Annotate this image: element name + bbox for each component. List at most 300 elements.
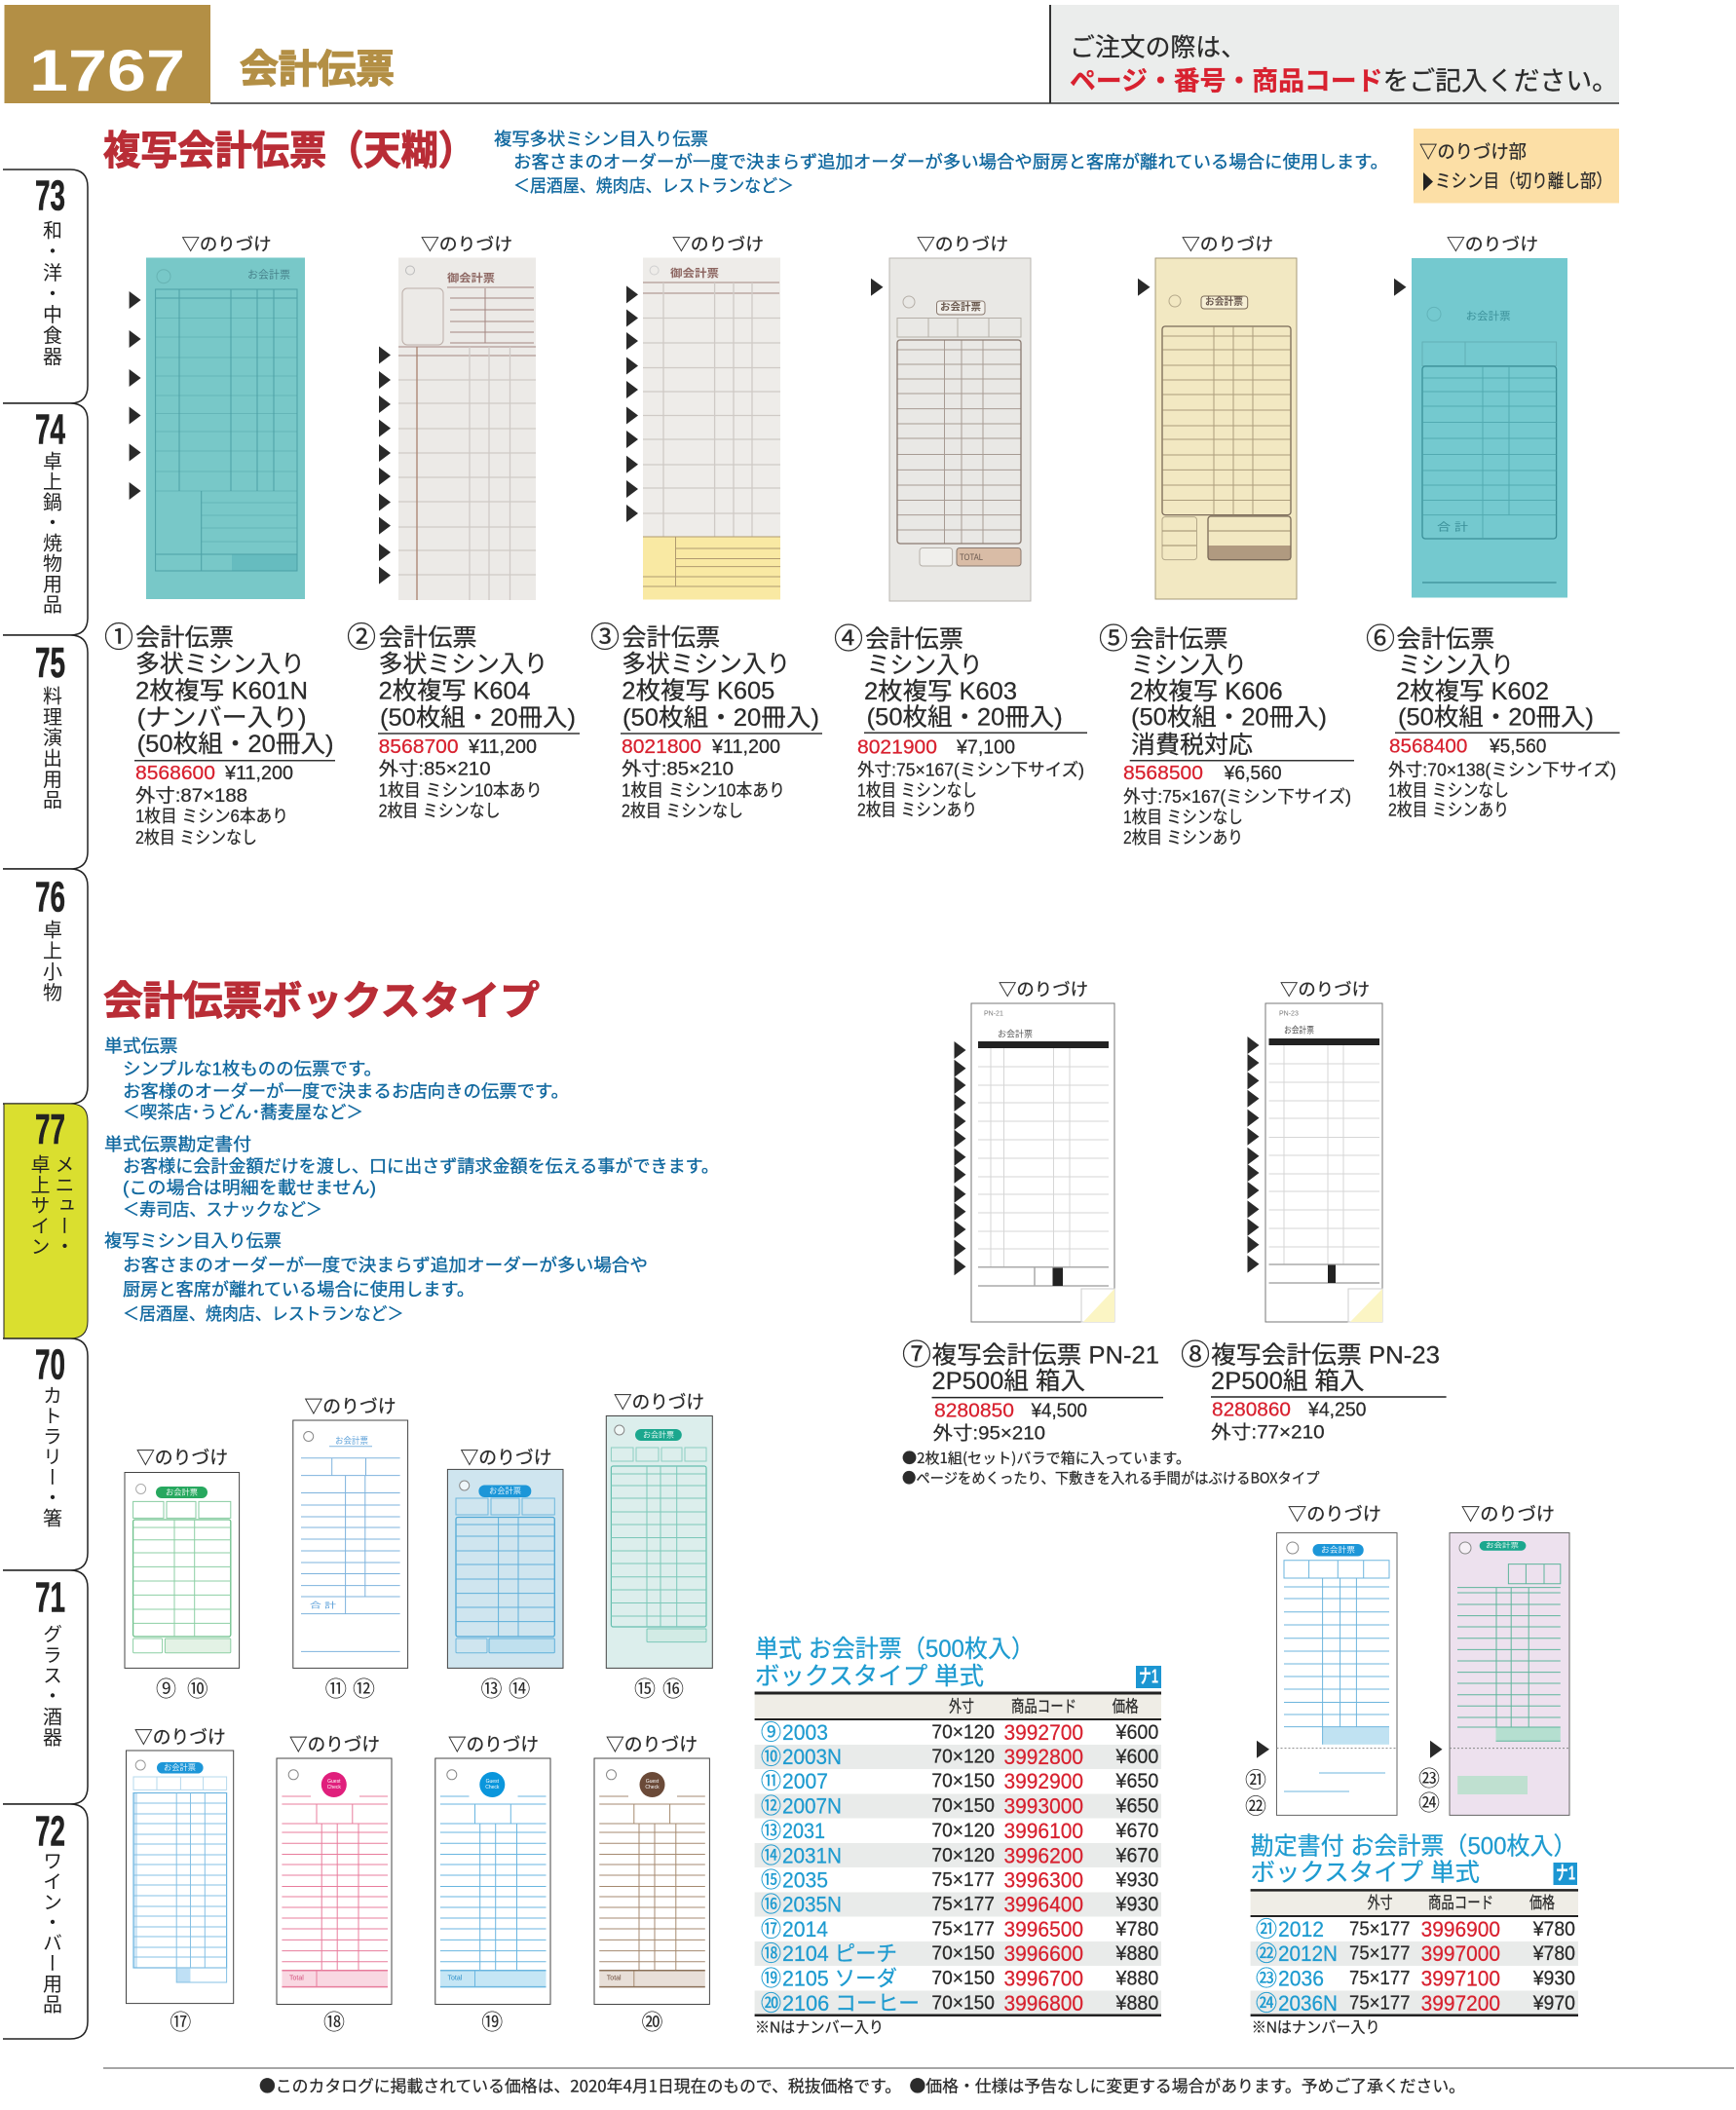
table footnote: ※Nはナンバー入り	[1252, 2020, 1380, 2036]
row 17: ¥780	[1115, 1918, 1158, 1940]
table header row: 外寸	[949, 1697, 974, 1716]
caption 3: (50枚組・20冊入)	[623, 704, 819, 732]
description: with bill	[104, 1135, 719, 1220]
caption 7	[902, 1339, 1163, 1444]
row 12: ¥650	[1115, 1794, 1158, 1817]
caption 8: 外寸:77×210	[1211, 1422, 1325, 1444]
caption 5: 8568500	[1123, 763, 1203, 784]
caption 6: 2枚複写 K602	[1396, 678, 1549, 705]
tab 70	[3, 1338, 88, 1570]
caption 2: 外寸:85×210	[379, 758, 491, 779]
page number tab: 1767	[29, 38, 185, 103]
row 12: ⑫	[761, 1793, 781, 1818]
caption 4: 2枚複写 K603	[864, 678, 1017, 705]
caption 3: ③	[590, 622, 620, 655]
form 21-22: ㉒	[1245, 1794, 1266, 1819]
row 22: 2012N	[1278, 1941, 1338, 1966]
caption 5: 会計伝票	[1130, 626, 1228, 654]
row 24: ㉔	[1256, 1991, 1277, 2016]
caption 8: 2P500組 箱入	[1211, 1368, 1364, 1395]
form 1: K601N: お会計票	[247, 267, 290, 281]
form 19 soda	[435, 1734, 550, 2034]
row 21: ㉑	[1256, 1917, 1277, 1941]
caption 1: ¥11,200	[224, 763, 293, 784]
description: single slip: シンプルな1枚ものの伝票です。	[123, 1060, 382, 1079]
form 4: K603	[871, 258, 1031, 601]
row 19: 70×150	[931, 1968, 995, 1989]
row 16: 3996400	[1003, 1892, 1083, 1917]
tab 71: グラス・酒器	[39, 1624, 62, 1748]
form 8: PN-23	[1247, 980, 1382, 1322]
row 19: ⑲	[761, 1966, 781, 1991]
form 19 soda: Total	[448, 1976, 463, 1981]
caption 6: 外寸:70×138(ミシン下サイズ)	[1388, 761, 1616, 780]
box type descriptions	[104, 1036, 719, 1324]
box notes	[902, 1448, 1319, 1488]
section description	[494, 130, 1388, 196]
form 20 coffee: Check	[645, 1785, 660, 1790]
row 9: 3992700	[1003, 1720, 1083, 1745]
form 7: PN-21	[955, 980, 1114, 1322]
caption 3: 会計伝票	[622, 624, 720, 652]
caption 1: 2枚目 ミシンなし	[135, 828, 257, 848]
table heading: ボックスタイプ 単式	[755, 1663, 984, 1690]
form 13-14 blue: ⑬	[481, 1677, 503, 1701]
table heading	[755, 1636, 1035, 1690]
caption 1	[104, 622, 335, 848]
form 18 peach: ⑱	[323, 2011, 345, 2034]
form 9-10 green: お会計票	[166, 1487, 198, 1496]
row 10: 70×120	[931, 1746, 995, 1767]
tab 71	[3, 1570, 88, 1804]
row 24: ¥970	[1532, 1992, 1575, 2015]
row 16: ¥930	[1115, 1894, 1158, 1915]
description: perforated copy: 厨房と客席が離れている場合に使用します。	[123, 1280, 474, 1300]
description: perforated copy: 複写ミシン目入り伝票	[104, 1231, 282, 1251]
row 10: 2003N	[782, 1745, 842, 1769]
form 5: K606: お会計票	[1205, 295, 1243, 308]
caption 4: 8021900	[857, 736, 937, 758]
form 8: PN-23: ▽のりづけ	[1280, 980, 1370, 999]
caption 1: 2枚複写 K601N	[135, 678, 308, 705]
row 10: 3992800	[1003, 1745, 1083, 1769]
description: with bill: (この場合は明細を載せません)	[123, 1179, 376, 1198]
table header row: 商品コード	[1011, 1697, 1076, 1716]
row 23: 3997100	[1421, 1966, 1500, 1991]
row 23	[1256, 1966, 1575, 1991]
row 21: 3996900	[1421, 1917, 1500, 1941]
tab 70: 70	[35, 1340, 65, 1389]
row 9: ⑨	[761, 1720, 781, 1745]
form 7: PN-21: PN-21	[984, 1011, 1003, 1017]
caption 7: ¥4,500	[1031, 1400, 1087, 1421]
description: with bill: 単式伝票勘定書付	[104, 1135, 251, 1154]
form 15-16 mint	[606, 1391, 712, 1701]
box notes: ●ページをめくったり、下敷きを入れる手間がはぶけるBOXタイプ	[902, 1467, 1319, 1488]
tab 76: 76	[35, 873, 65, 922]
row 20: ¥880	[1115, 1992, 1158, 2015]
row 15: ¥930	[1115, 1868, 1158, 1892]
row 22	[1256, 1941, 1575, 1966]
row 12	[761, 1793, 1158, 1818]
row 11	[761, 1769, 1158, 1793]
table header row: 外寸	[1368, 1894, 1393, 1912]
form 20 coffee: Guest	[646, 1779, 660, 1785]
form 15-16 mint: お会計票	[643, 1430, 674, 1440]
form 9-10 green: ⑩	[187, 1677, 208, 1701]
form 13-14 blue: ▽のりづけ	[460, 1448, 551, 1469]
row 23: 75×177	[1349, 1968, 1410, 1989]
description: perforated copy: お客さまのオーダーが一度で決まらず追加オーダーが多い場合や	[123, 1256, 648, 1275]
caption 3: 多状ミシン入り	[622, 651, 790, 678]
tab 77 active: 77	[35, 1106, 65, 1153]
row 24: 75×177	[1349, 1992, 1410, 2014]
caption 8: ¥4,250	[1307, 1400, 1366, 1421]
caption 7: 複写会計伝票 PN-21	[931, 1341, 1159, 1369]
row 12: 2007N	[782, 1793, 842, 1818]
caption 4: ④	[834, 623, 863, 656]
caption 8	[1181, 1339, 1447, 1444]
row 14: ¥670	[1115, 1844, 1158, 1866]
row 13: ¥670	[1115, 1820, 1158, 1842]
form 3: K605: 御会計票	[670, 266, 719, 280]
form 8: PN-23: PN-23	[1279, 1011, 1299, 1017]
form 20 coffee: ⑳	[641, 2011, 662, 2034]
row 13	[761, 1819, 1158, 1843]
row 22: ㉒	[1256, 1941, 1277, 1966]
section title: 複写会計伝票(天糊): 複写会計伝票（天糊）	[103, 129, 475, 173]
form 18 peach: Guest	[327, 1779, 341, 1785]
row 15	[761, 1868, 1158, 1892]
order notice panel	[1050, 5, 1619, 103]
paste labels row 1	[181, 235, 1538, 254]
description: single slip: 単式伝票	[104, 1036, 177, 1056]
caption 1: (50枚組・20冊入)	[137, 731, 334, 758]
caption 1: 多状ミシン入り	[135, 651, 305, 678]
row 20: ⑳	[761, 1991, 781, 2016]
row 22: ¥780	[1532, 1942, 1575, 1965]
row 18: ⑱	[761, 1941, 781, 1966]
caption 6: ⑥	[1366, 623, 1395, 656]
caption 3: ¥11,200	[711, 736, 780, 758]
row 19: 2105 ソーダ	[782, 1966, 897, 1991]
form 20 coffee: Total	[607, 1976, 622, 1981]
tab 72	[3, 1804, 88, 2039]
row 14: 70×120	[931, 1845, 995, 1866]
row 10	[761, 1745, 1158, 1769]
caption 3: 2枚目 ミシンなし	[622, 801, 743, 820]
row 23: 2036	[1278, 1966, 1324, 1991]
row 18: ¥880	[1115, 1942, 1158, 1965]
row 17	[761, 1917, 1158, 1941]
table header row	[755, 1693, 1161, 1719]
row 19: ¥880	[1115, 1968, 1158, 1989]
table heading: 単式 お会計票（500枚入）	[755, 1636, 1035, 1663]
table header row	[1251, 1890, 1578, 1916]
description: perforated copy: ＜居酒屋、焼肉店、レストランなど＞	[123, 1304, 403, 1324]
header title: 会計伝票	[240, 49, 395, 92]
form 15-16 mint: ⑯	[662, 1677, 684, 1701]
row 14: 3996200	[1003, 1843, 1083, 1867]
table footnote: ※Nはナンバー入り	[755, 2020, 884, 2036]
caption 4: (50枚組・20冊入)	[867, 704, 1063, 732]
tab 74	[3, 403, 88, 635]
badge	[1553, 1863, 1577, 1885]
row 11: ⑪	[761, 1769, 781, 1793]
caption 4: 会計伝票	[865, 626, 963, 654]
row 15: ⑮	[761, 1868, 781, 1892]
caption 5: ミシン入り	[1131, 652, 1247, 679]
form 6: K602	[1394, 258, 1567, 598]
badge: ナ1	[1139, 1666, 1158, 1687]
form 2: K604	[379, 257, 536, 600]
caption 4	[834, 623, 1087, 820]
paste labels row 1: ▽のりづけ	[672, 235, 764, 254]
order notice panel: ご注文の際は、	[1070, 33, 1246, 62]
caption 6: ¥5,560	[1489, 736, 1546, 758]
caption 7: ⑦	[902, 1339, 931, 1372]
form 17: お会計票	[164, 1762, 196, 1772]
tab 72: ワイン・バー用品	[39, 1851, 62, 2015]
tab 77 active: メニュー・	[52, 1154, 73, 1257]
row 17: ⑰	[761, 1917, 781, 1941]
row 11: 2007	[782, 1769, 828, 1793]
row 14: 2031N	[782, 1843, 842, 1867]
row 11: 3992900	[1003, 1769, 1083, 1793]
caption 2: 2枚目 ミシンなし	[379, 801, 501, 820]
caption 6: 2枚目 ミシンあり	[1388, 801, 1509, 820]
caption 5: (50枚組・20冊入)	[1131, 704, 1327, 732]
caption 5: 消費税対応	[1131, 732, 1253, 759]
row 11: 70×150	[931, 1771, 995, 1792]
tab 71: 71	[35, 1574, 65, 1621]
caption 2: (50枚組・20冊入)	[380, 704, 576, 732]
row 15: 75×177	[931, 1869, 995, 1891]
caption 1: 会計伝票	[135, 624, 234, 652]
form 9-10 green	[125, 1448, 240, 1701]
caption 5: ¥6,560	[1224, 763, 1282, 784]
order notice panel: ページ・番号・商品コードをご記入ください。	[1070, 66, 1618, 95]
legend box: ミシン目（切り離し部）	[1435, 170, 1612, 192]
paste labels row 1: ▽のりづけ	[181, 235, 271, 254]
form 13-14 blue	[447, 1448, 563, 1701]
form 1: K601N	[130, 257, 305, 599]
paste labels row 1: ▽のりづけ	[1447, 235, 1538, 254]
form 6: K602: お会計票	[1466, 309, 1511, 322]
form 11-12 white: 合 計	[310, 1600, 336, 1609]
row 21: ¥780	[1532, 1918, 1575, 1940]
badge	[1136, 1666, 1161, 1688]
caption 6: 会計伝票	[1396, 626, 1494, 654]
caption 2: 2枚複写 K604	[379, 678, 531, 705]
row 17: 2014	[782, 1917, 828, 1941]
caption 7: 2P500組 箱入	[931, 1368, 1085, 1395]
row 21: 2012	[1278, 1917, 1324, 1941]
caption 3: 1枚目 ミシン10本あり	[622, 781, 785, 801]
form 8: PN-23: お会計票	[1284, 1025, 1314, 1036]
tab 75	[3, 635, 88, 869]
caption 2: 会計伝票	[379, 624, 477, 652]
section description: お客さまのオーダーが一度で決まらず追加オーダーが多い場合や厨房と客席が離れている場合に使用します。	[513, 152, 1388, 171]
tab 73: 73	[35, 171, 65, 220]
caption 7: 8280850	[934, 1400, 1014, 1421]
row 13: 2031	[782, 1819, 825, 1843]
form 6: K602: 合 計	[1437, 520, 1468, 534]
row 18: 2104 ピーチ	[782, 1941, 897, 1966]
form 19 soda: Guest	[486, 1779, 500, 1785]
caption 1: 8568600	[135, 763, 215, 784]
form 18 peach: Check	[327, 1785, 341, 1790]
caption 8: 複写会計伝票 PN-23	[1211, 1341, 1440, 1369]
row 16: 75×177	[931, 1894, 995, 1915]
row 13: 70×120	[931, 1821, 995, 1842]
form 17	[127, 1726, 234, 2034]
row 13: ⑬	[761, 1819, 781, 1843]
row 16: 2035N	[782, 1892, 842, 1917]
description: perforated copy	[104, 1231, 648, 1324]
row 18: 3996600	[1003, 1941, 1083, 1966]
caption 1: (ナンバー入り)	[137, 704, 307, 732]
form 19 soda: ▽のりづけ	[448, 1734, 539, 1755]
caption 4: ¥7,100	[956, 736, 1015, 758]
caption 5: 1枚目 ミシンなし	[1123, 808, 1243, 827]
row 18	[761, 1941, 1158, 1966]
row 19	[761, 1966, 1158, 1991]
form 19 soda: ⑲	[481, 2011, 503, 2034]
alternating row shading	[755, 1745, 1161, 2015]
form 3: K605	[626, 257, 780, 600]
row 14	[761, 1843, 1158, 1867]
tab 74: 74	[35, 405, 65, 454]
form 23-24: ㉔	[1418, 1790, 1440, 1816]
form 11-12 white: ⑫	[353, 1677, 375, 1701]
form 18 peach: ▽のりづけ	[289, 1734, 380, 1755]
row 23: ㉓	[1256, 1966, 1277, 1991]
caption 2: 8568700	[379, 736, 459, 758]
caption 2: ②	[347, 622, 376, 655]
description: single slip: お客様のオーダーが一度で決まるお店向きの伝票です。	[123, 1081, 569, 1101]
row 14: ⑭	[761, 1843, 781, 1867]
form 11-12 white: お会計票	[335, 1435, 368, 1446]
row 23: ¥930	[1532, 1968, 1575, 1989]
row 9	[761, 1720, 1158, 1745]
table header row: 価格	[1529, 1894, 1555, 1912]
row 24: 3997200	[1421, 1991, 1500, 2016]
caption 2: 多状ミシン入り	[379, 651, 548, 678]
legend box	[1414, 129, 1619, 203]
caption 2	[347, 622, 580, 820]
tab 73: 和・洋・中食器	[39, 220, 62, 367]
form 11-12 white: ▽のりづけ	[304, 1396, 396, 1417]
form 13-14 blue: お会計票	[489, 1486, 521, 1495]
form 18 peach: Total	[289, 1976, 304, 1981]
tab 76	[3, 869, 88, 1104]
form 23-24: お会計票	[1486, 1540, 1519, 1549]
form 2: K604: 御会計票	[447, 271, 495, 284]
form 17: ⑰	[170, 2011, 191, 2034]
form 11-12 white	[293, 1396, 408, 1701]
caption 1: ①	[104, 622, 133, 655]
row 10: ¥600	[1115, 1746, 1158, 1768]
caption 5: 2枚目 ミシンあり	[1123, 828, 1243, 848]
caption 6: 8568400	[1389, 736, 1467, 758]
caption 4: 1枚目 ミシンなし	[857, 781, 977, 801]
form 19 soda: Check	[485, 1785, 500, 1790]
box notes: ●2枚1組(セット)バラで箱に入っています。	[902, 1448, 1190, 1468]
description: with bill: お客様に会計金額だけを渡し、口に出さず請求金額を伝える事ができます。	[123, 1157, 719, 1177]
sidebar tabs	[3, 170, 88, 2039]
caption 5: 2枚複写 K606	[1130, 678, 1283, 705]
row 18: 70×150	[931, 1943, 995, 1965]
row 9: ¥600	[1115, 1721, 1158, 1744]
caption 2: ¥11,200	[468, 736, 537, 758]
caption 1: 外寸:87×188	[135, 785, 247, 807]
caption 3: 2枚複写 K605	[622, 678, 774, 705]
form 15-16 mint: ⑮	[634, 1677, 656, 1701]
row 10: ⑩	[761, 1745, 781, 1769]
row 17: 75×177	[931, 1919, 995, 1940]
form 4: K603: TOTAL	[960, 552, 983, 562]
badge: ナ1	[1556, 1863, 1575, 1884]
tab 75: 料理演出用品	[39, 686, 62, 810]
paste labels row 1: ▽のりづけ	[421, 235, 512, 254]
paste labels row 1: ▽のりづけ	[917, 235, 1008, 254]
table: single slip box type	[755, 1636, 1161, 2036]
paste labels row 1: ▽のりづけ	[1182, 235, 1273, 254]
caption 4: 外寸:75×167(ミシン下サイズ)	[857, 761, 1084, 780]
row 12: 70×150	[931, 1795, 995, 1817]
form 23-24: ▽のりづけ	[1461, 1504, 1555, 1526]
table header row: 商品コード	[1428, 1894, 1493, 1912]
caption 7: 外寸:95×210	[933, 1422, 1045, 1444]
form 21-22: お会計票	[1321, 1545, 1355, 1555]
footer: ●このカタログに掲載されている価格は、2020年4月1日現在のもので、税抜価格です。 ●価格・仕様は予告なしに変更する場合があります。予めご了承ください。	[259, 2073, 1465, 2096]
caption 8: 8280860	[1212, 1400, 1291, 1421]
row 24: 2036N	[1278, 1991, 1338, 2016]
section description: 複写多状ミシン目入り伝票	[494, 130, 708, 149]
caption 5: ⑤	[1099, 623, 1128, 656]
form 7: PN-21: ▽のりづけ	[999, 980, 1088, 999]
row 21: 75×177	[1349, 1919, 1410, 1940]
caption 4: 2枚目 ミシンあり	[857, 801, 977, 820]
form 23-24: ㉓	[1418, 1767, 1440, 1790]
caption 3: 外寸:85×210	[622, 758, 734, 779]
row 20	[761, 1991, 1158, 2016]
description: single slip	[104, 1036, 569, 1122]
tab 70: カトラリー・箸	[39, 1385, 62, 1528]
table: with bill box type	[1251, 1833, 1578, 2036]
page number tab	[4, 5, 210, 103]
form 17: ▽のりづけ	[134, 1726, 226, 1748]
tab 74: 卓上鍋・焼物用品	[39, 451, 62, 615]
form 21-22	[1245, 1504, 1397, 1819]
table header row: 価格	[1113, 1697, 1139, 1716]
row 16	[761, 1892, 1158, 1917]
caption 6: ミシン入り	[1398, 652, 1514, 679]
page header	[4, 5, 1619, 103]
form 20 coffee: ▽のりづけ	[606, 1734, 698, 1755]
caption 8: ⑧	[1181, 1339, 1210, 1372]
legend box: ▽のりづけ部	[1419, 141, 1527, 163]
row 9: 70×120	[931, 1721, 995, 1743]
form 20 coffee	[594, 1734, 709, 2034]
row 15: 3996300	[1003, 1868, 1083, 1892]
form 9-10 green: ⑨	[156, 1677, 176, 1701]
row 21	[1256, 1917, 1575, 1941]
row 20: 3996800	[1003, 1991, 1083, 2016]
table heading: 勘定書付 お会計票（500枚入）	[1251, 1833, 1577, 1861]
tab 76: 卓上小物	[39, 920, 62, 1003]
